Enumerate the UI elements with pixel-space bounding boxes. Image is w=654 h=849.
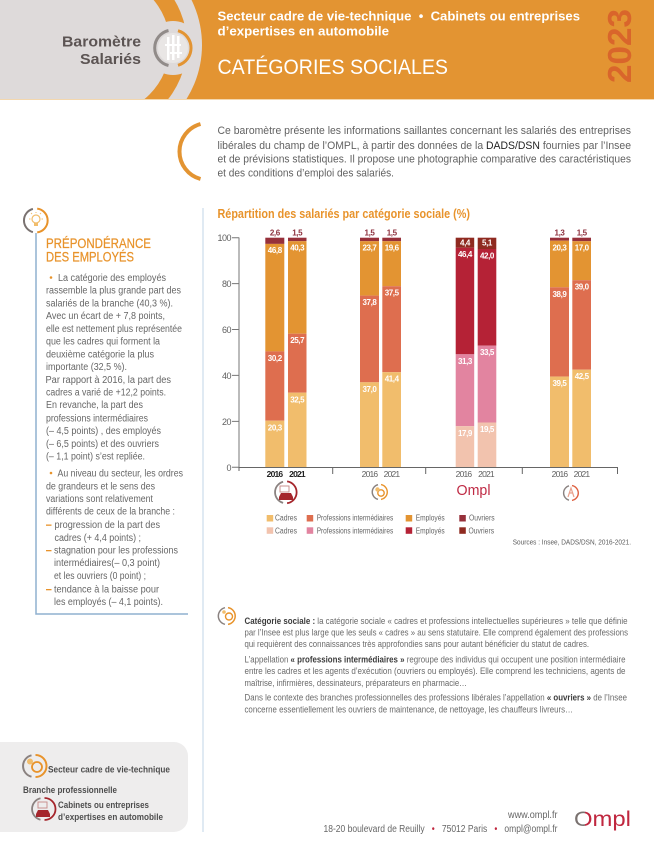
sector label: Secteur cadre de vie-technique: [48, 765, 170, 775]
bars: professions libérales: 2021: [574, 469, 590, 479]
legend: [267, 514, 495, 535]
bars: secteur cadre de vie-technique, cabinets automobile: 2016: [267, 469, 283, 479]
icon: intro bracket arc: [179, 124, 200, 179]
bars: ensemble OMPL: 31,3: [458, 357, 473, 366]
panel body text: La catégorie des employés: [58, 273, 166, 284]
panel: sector and branch box: [0, 742, 188, 832]
legend: Professions intermédiaires: [317, 526, 393, 535]
panel body text: (– 1,1 point) s’est repliée.: [46, 452, 145, 462]
icon: secteur: [372, 485, 387, 499]
definitions text: Catégorie sociale : la catégorie sociale « cadres et professions intellectuelles supérieures » telle que définie: [244, 616, 628, 626]
bars: professions libérales: 39,5: [553, 379, 567, 388]
bars: professions libérales: 38,9: [553, 290, 567, 299]
definitions text: qui requièrent des connaissances très approfondies sans pour autant bénéficier du statut de cadres.: [244, 639, 589, 649]
sources note: Sources : Insee, DADS/DSN, 2016-2021.: [513, 537, 631, 546]
bars: secteur cadre de vie-technique, cabinets automobile: 30,2: [268, 354, 283, 363]
icon: professions libérales: [564, 486, 578, 500]
panel body text: progression de la part des: [54, 520, 160, 531]
panel body text: de grandeurs et le sens des: [46, 482, 155, 492]
bars: secteur cadre de vie-technique, cabinets automobile: 2,6: [270, 228, 281, 238]
panel heading: PRÉPONDÉRANCE: [46, 236, 151, 251]
panel body text: cadres (+ 4,4 points) ;: [54, 533, 141, 544]
legend: Ouvriers: [469, 514, 495, 523]
year: 2023: [601, 9, 638, 83]
panel body text: professions intermédiaires: [46, 414, 148, 425]
intro text: et de prévisions statistiques. Il propose une photographie comparative des caractéristiques: [218, 154, 631, 166]
bars: secteur: 23,7: [363, 244, 377, 252]
bars: secteur cadre de vie-technique, cabinets automobile: 2021: [289, 469, 306, 479]
intro text: [218, 125, 631, 180]
bars: ensemble OMPL: 42,0: [480, 252, 495, 260]
brand name: Baromètre Salariés: Baromètre: [62, 35, 141, 51]
bars: professions libérales: 1,5: [577, 228, 588, 238]
y axis: 80: [222, 279, 231, 289]
footer contact: [324, 810, 558, 835]
footer contact: www.ompl.fr: [507, 810, 558, 821]
bars: professions libérales: 39,0: [575, 282, 590, 292]
panel body text: (– 6,5 points) et des ouvriers: [46, 439, 159, 450]
panel body text: Par rapport à 2016, la part des: [46, 375, 171, 386]
bars: ensemble OMPL: 17,9: [458, 429, 473, 438]
header banner: [0, 0, 654, 100]
bars: professions libérales: [550, 228, 591, 479]
icon: car expertise: [275, 481, 297, 503]
legend: Employés: [416, 526, 445, 535]
legend: Professions intermédiaires: [317, 514, 393, 523]
definitions text: L’appellation « professions intermédiaires » regroupe des individus qui occupent une position intermédiaire: [244, 654, 626, 664]
bars: secteur cadre de vie-technique, cabinets automobile: [265, 228, 306, 479]
icon: définition: [218, 608, 235, 624]
panel body text: Avec un écart de + 7,8 points,: [46, 311, 165, 322]
panel heading: DES EMPLOYÉS: [46, 250, 134, 265]
footer contact: 18-20 boulevard de Reuilly • 75012 Paris • ompl@ompl.fr: [324, 824, 558, 835]
bars: ensemble OMPL: 4,4: [460, 238, 471, 248]
title: CATÉGORIES SOCIALES: [218, 56, 448, 79]
bars: ensemble OMPL: 19,5: [480, 425, 495, 434]
panel: prépondérance des employés: [24, 209, 188, 614]
panel body text: elle est nettement plus représentée: [46, 324, 182, 335]
panel body text: (– 4,5 points) , des employés: [46, 426, 161, 437]
legend: Cadres: [275, 526, 297, 535]
intro text: Ce baromètre présente les informations saillantes concernant les salariés des entreprises: [218, 125, 631, 137]
bars: secteur: 2021: [384, 469, 400, 479]
panel body text: [46, 273, 183, 608]
bar chart: [217, 228, 631, 546]
definitions text: entre les cadres et les agents d’exécution (ouvriers ou employés). Elle comprend les techniciens, agents de: [244, 666, 626, 676]
panel body text: salariés de la branche (40,3 %).: [46, 298, 173, 309]
panel body text: différents de ceux de la branche :: [46, 507, 175, 518]
legend: Cadres: [275, 514, 297, 523]
panel body text: deuxième catégorie la plus: [46, 350, 154, 360]
bars: ensemble OMPL: 33,5: [480, 348, 495, 357]
panel heading: [46, 236, 151, 265]
bars: professions libérales: 20,3: [553, 244, 567, 252]
logo: Ompl: Ompl: [456, 483, 490, 499]
bars: secteur: 37,0: [363, 385, 377, 394]
y axis: 60: [222, 325, 231, 335]
panel body text: importante (32,5 %).: [46, 362, 127, 373]
y axis: 40: [222, 371, 231, 381]
bars: secteur cadre de vie-technique, cabinets automobile: 20,3: [268, 424, 283, 432]
panel body text: que les cadres qui forment la: [46, 337, 160, 348]
definitions text: Dans le contexte des branches professionnelles des professions libérales l’appellation « ouvriers » de l’Insee: [244, 693, 627, 703]
panel body text: Au niveau du secteur, les ordres: [58, 469, 183, 480]
definitions text: maîtrise, infirmières, dessinateurs, préparateurs en pharmacie…: [244, 678, 467, 688]
branch name: [58, 800, 163, 822]
panel body text: intermédiaires(– 0,3 point): [54, 558, 160, 569]
bars: secteur: 37,5: [385, 288, 400, 298]
panel body text: variations sont relativement: [46, 494, 153, 505]
icon: barometer: [155, 30, 191, 66]
panel body text: cadres a varié de +12,2 points.: [46, 388, 166, 398]
bars: ensemble OMPL: 46,4: [458, 250, 473, 259]
bars: secteur: 1,5: [365, 228, 375, 238]
bars: professions libérales: 42,5: [575, 372, 590, 381]
panel body text: tendance à la baisse pour: [54, 584, 160, 596]
bars: secteur: [360, 228, 401, 479]
definitions text: [244, 616, 629, 715]
bars: ensemble OMPL: [456, 238, 496, 479]
legend: Employés: [416, 514, 445, 523]
bars: secteur cadre de vie-technique, cabinets automobile: 46,8: [268, 246, 283, 255]
bars: secteur: 19,6: [385, 244, 400, 252]
intro text: et des conditions d’emploi des salariés.: [218, 168, 394, 180]
bars: secteur: 37,8: [363, 298, 377, 307]
icon: secteur: [23, 755, 47, 777]
bars: secteur cadre de vie-technique, cabinets automobile: 1,5: [292, 228, 303, 238]
panel body text: rassemble la plus grande part des: [46, 286, 181, 297]
bars: secteur: 41,4: [385, 374, 400, 384]
panel body text: et les ouvriers (0 point) ;: [54, 571, 146, 582]
sector subtitle: [218, 9, 580, 39]
panel body text: les employés (– 4,1 points).: [54, 597, 163, 608]
branch name: Cabinets ou entreprises: [58, 800, 149, 810]
y axis: 20: [222, 417, 231, 427]
x axis: [239, 467, 618, 474]
y axis: 0: [226, 463, 231, 473]
bars: secteur: 2016: [362, 469, 378, 479]
branch name: d’expertises en automobile: [58, 812, 163, 822]
bars: ensemble OMPL: 5,1: [482, 238, 493, 248]
legend: Ouvriers: [468, 526, 494, 535]
panel body text: stagnation pour les professions: [54, 546, 178, 556]
bars: professions libérales: 2016: [552, 469, 568, 479]
branch label: Branche professionnelle: [23, 785, 117, 795]
bars: professions libérales: 1,3: [555, 228, 565, 238]
logo: Ompl footer: Ompl: [574, 808, 631, 831]
icon: lightbulb: [24, 209, 48, 232]
chart heading: Répartition des salariés par catégorie sociale (%): [218, 207, 470, 221]
bars: ensemble OMPL: 2021: [478, 469, 495, 479]
definitions text: concerne essentiellement les ouvriers de maintenance, de nettoyage, les chauffeurs livreurs…: [244, 705, 573, 715]
bars: secteur: 1,5: [387, 228, 398, 238]
sector subtitle: d’expertises en automobile: [218, 24, 389, 39]
brand name: Baromètre Salariés: Salariés: [80, 52, 141, 68]
y axis: [217, 233, 239, 473]
intro text: libérales du champ de l’OMPL, à partir des données de la DADS/DSN fournies par l’Insee: [218, 140, 631, 152]
icon: car expertise: [32, 798, 56, 820]
sector subtitle: Secteur cadre de vie-technique • Cabinets ou entreprises: [218, 9, 580, 24]
bars: ensemble OMPL: 2016: [456, 469, 472, 479]
brand name: Baromètre Salariés: [62, 35, 141, 68]
bars: secteur cadre de vie-technique, cabinets automobile: 32,5: [290, 396, 305, 404]
bars: secteur cadre de vie-technique, cabinets automobile: 40,3: [290, 244, 305, 252]
y axis: 100: [217, 233, 231, 243]
bars: professions libérales: 17,0: [575, 244, 590, 252]
panel: définitions: [218, 608, 629, 715]
bars: secteur cadre de vie-technique, cabinets automobile: 25,7: [290, 336, 305, 345]
panel body text: En revanche, la part des: [46, 400, 143, 411]
